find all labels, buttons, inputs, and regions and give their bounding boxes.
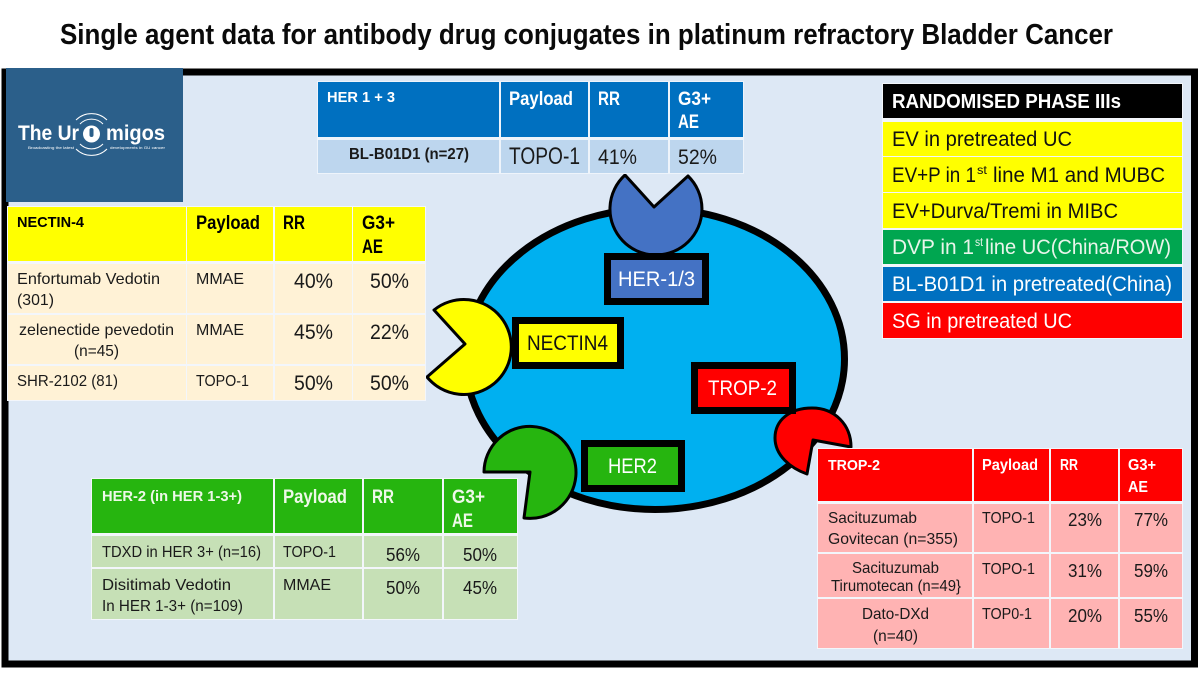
table: HER-2: HER-2 (in HER 1-3+) [102,488,242,505]
table: NECTIN-4: (n=45) [74,343,119,360]
table: TROP-2: 59% [1134,561,1168,581]
table: HER-2: TOPO-1 [283,544,336,561]
table: NECTIN-4: TOPO-1 [196,373,249,390]
table: NECTIN-4: MMAE [196,322,244,339]
table: NECTIN-4: NECTIN-4 [17,214,85,231]
table: HER-2: G3+ [452,487,485,508]
table: NECTIN-4: G3+ [362,213,395,234]
table: TROP-2: Tirumotecan (n=49} [831,578,962,595]
table: HER-2: TDXD in HER 3+ (n=16) [102,544,261,561]
table: HER 1 + 3: RR [598,89,620,110]
row: DVP: line UC(China/ROW) [985,235,1171,259]
row: SG: SG in pretreated UC [892,309,1072,333]
table: NECTIN-4: 50% [370,372,409,395]
table: TROP-2: TROP-2 [828,457,880,474]
row: DVP: DVP in 1 [892,235,974,259]
receptor: NECTIN4 pacman [427,299,511,394]
table: NECTIN-4: Enfortumab Vedotin [17,271,160,288]
table: TROP-2: TOPO-1 [982,561,1035,578]
table: NECTIN-4: 22% [370,321,409,344]
table: HER 1 + 3: TOPO-1 [509,143,580,170]
table: TROP-2: 31% [1068,561,1102,581]
table: TROP-2: Sacituzumab [852,560,939,577]
table: NECTIN-4: MMAE [196,271,244,288]
table: TROP-2: 20% [1068,606,1102,626]
table: HER 1 + 3: Payload [509,89,573,110]
logo: The Uromigos [6,68,183,202]
cell body [466,208,844,510]
logo: The Uromigos: developments in GU cancer [110,145,166,150]
row: BL-B01D1: BL-B01D1 in pretreated(China) [892,272,1172,296]
table: HER 1 + 3 [317,81,744,174]
table: NECTIN-4 [7,206,426,401]
table: NECTIN-4: AE [362,237,383,258]
row: EV pretreated: EV in pretreated UC [892,127,1072,151]
header row: RANDOMISED PHASE IIIs [892,90,1121,113]
header row [883,84,1182,118]
table: TROP-2: Dato-DXd [862,606,929,623]
title: Single agent data for antibody drug conjugates in platinum refractory Bladder Cancer [60,19,1113,51]
table: TROP-2: G3+ [1128,457,1156,474]
label: HER-1/3 [608,256,706,302]
receptor: HER2 pacman [484,426,576,518]
label: HER2: HER2 [608,455,657,478]
table: TROP-2: Sacituzumab [828,510,917,527]
table: HER-2 [91,478,518,620]
table: TROP-2 [817,448,1183,649]
cell diagram [427,175,851,518]
row: DVP: st [975,235,984,249]
table: HER 1 + 3: G3+ [678,89,711,110]
table: TROP-2: Govitecan (n=355) [828,531,958,548]
table: NECTIN-4: 50% [294,372,333,395]
table: NECTIN-4: 50% [370,270,409,293]
table: TROP-2: Payload [982,457,1038,474]
table: TROP-2: (n=40) [873,628,918,645]
table: TROP-2: 77% [1134,510,1168,530]
table: NECTIN-4: (301) [17,292,54,309]
table: NECTIN-4: Payload [196,213,260,234]
table: NECTIN-4: zelenectide pevedotin [19,322,174,339]
row: EV+Durva/Tremi: EV+Durva/Tremi in MIBC [892,199,1118,223]
row: EV+P: line M1 and MUBC [993,163,1165,187]
table: HER-2: 56% [386,545,420,565]
table: HER-2: 50% [386,578,420,598]
receptor: TROP-2 pacman [775,408,851,474]
label: TROP-2 [694,366,792,410]
row: SG [883,303,1182,338]
table: HER-2: RR [372,487,394,508]
table: TROP-2: RR [1060,457,1078,474]
table: HER 1 + 3: AE [678,112,699,133]
receptor: HER-1/3 pacman [610,175,702,255]
logo: The Uromigos: The Ur [18,122,79,145]
table: HER-2: MMAE [283,577,331,594]
table: HER-2: Disitimab Vedotin [102,577,231,594]
table: HER-2: 50% [463,545,497,565]
table: HER-2: 45% [463,578,497,598]
row: EV+Durva/Tremi [883,193,1182,228]
label: NECTIN4: NECTIN4 [527,332,608,355]
logo: The Uromigos: migos [106,122,165,145]
table: NECTIN-4: SHR-2102 (81) [17,373,118,390]
table: HER-2: In HER 1-3+ (n=109) [102,598,243,615]
table: TROP-2: TOPO-1 [982,510,1035,527]
row: BL-B01D1 [883,267,1182,301]
table: NECTIN-4: RR [283,213,305,234]
row: EV+P: EV+P in 1 [892,163,976,187]
table: HER 1 + 3: 52% [678,146,717,169]
label: TROP-2: TROP-2 [708,377,777,400]
logo: The Uromigos: Broadcasting the latest [28,145,75,150]
row: DVP [883,230,1182,264]
table: HER 1 + 3: HER 1 + 3 [327,89,395,106]
table: NECTIN-4: 45% [294,321,333,344]
table: randomised phase IIIs [882,83,1183,339]
table: HER-2: Payload [283,487,347,508]
table: TROP-2: AE [1128,479,1148,496]
table: NECTIN-4: 40% [294,270,333,293]
row: EV+P: st [977,163,988,177]
row: EV pretreated [883,122,1182,156]
table: HER-2: AE [452,511,473,532]
table: TROP-2: 23% [1068,510,1102,530]
label: NECTIN4 [516,320,620,366]
table: TROP-2: 55% [1134,606,1168,626]
table: TROP-2: TOP0-1 [982,606,1032,623]
label: HER2 [584,444,682,488]
table: HER 1 + 3: BL-B01D1 (n=27) [349,146,469,163]
table: HER 1 + 3: 41% [598,146,637,169]
row: EV+P [883,157,1182,192]
label: HER-1/3: HER-1/3 [618,268,695,291]
